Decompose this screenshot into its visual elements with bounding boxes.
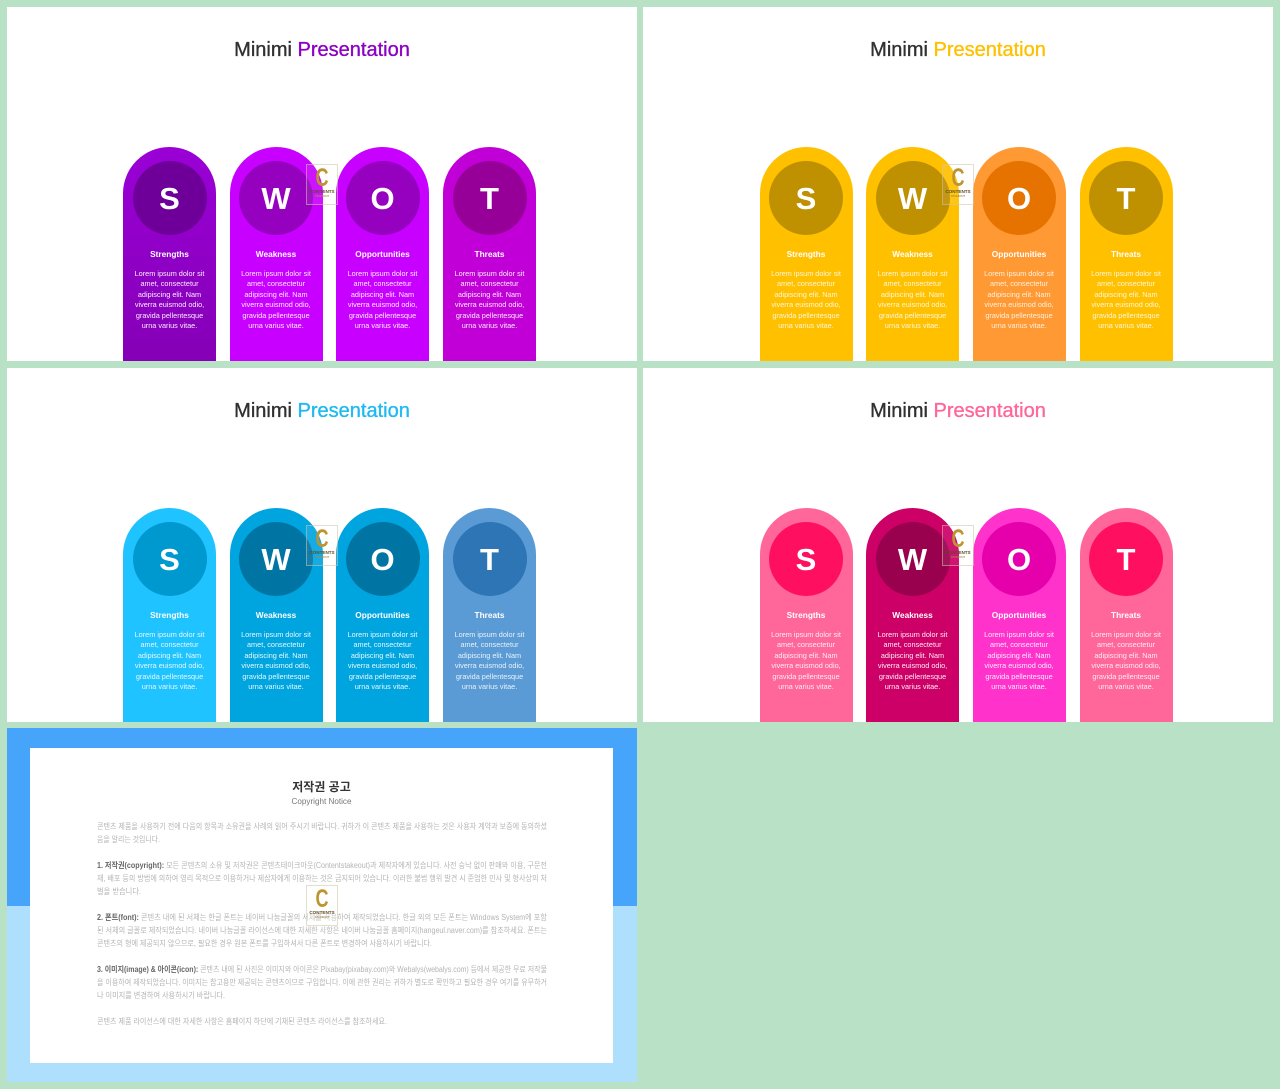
heading: Weakness: Weakness (892, 249, 933, 259)
text: Threats body (1091, 268, 1161, 330)
text: Threats body: adipiscing elit. Nam (458, 650, 521, 660)
text: Weakness body: amet, consectetur (884, 640, 942, 649)
text: Strengths body: Lorem ipsum dolor sit (771, 630, 841, 638)
text: Threats body: viverra euismod odio, (1091, 300, 1161, 309)
icon: watermark: C (951, 164, 965, 192)
card: Weakness (866, 147, 959, 361)
card: Weakness (230, 508, 322, 722)
text: Threats body: urna varius vitae. (1098, 321, 1154, 330)
text: Strengths body: gravida pellentesque (772, 672, 840, 680)
text: section 1 copyright (97, 860, 547, 896)
icon: T circle: T (1117, 542, 1135, 576)
text: Opportunities body: amet, consectetur (990, 640, 1048, 649)
text: Threats body: viverra euismod odio, (455, 661, 524, 670)
title: yellow: Minimi Presentation (870, 39, 1046, 61)
panel: purple SWOT (7, 7, 637, 361)
title: blue: Minimi Presentation (234, 400, 410, 422)
text: Opportunities body: amet, consectetur (354, 640, 412, 649)
icon: W circle (876, 160, 950, 234)
text: Opportunities body: adipiscing elit. Nam (351, 290, 414, 298)
notice sheet (30, 748, 613, 1063)
icon: S circle: S (159, 180, 180, 216)
card: Weakness (230, 147, 322, 361)
heading: Strengths: Strengths (787, 249, 825, 259)
text: Strengths body (771, 630, 841, 691)
text: Weakness body: Lorem ipsum dolor sit (878, 630, 947, 638)
text: Strengths body: gravida pellentesque (136, 672, 203, 680)
card: Opportunities (972, 508, 1066, 722)
icon: watermark: CONTENTS (309, 189, 335, 194)
text: introduction: 음을 알리는 것입니다. (97, 834, 160, 844)
text: Strengths body (771, 268, 841, 330)
text: Threats body: urna varius vitae. (1098, 682, 1154, 691)
icon: watermark (306, 885, 338, 926)
text: Strengths body: Lorem ipsum dolor sit (771, 268, 841, 278)
text: Threats body: urna varius vitae. (462, 321, 517, 330)
text: Weakness body: Lorem ipsum dolor sit (878, 268, 947, 278)
text: Strengths body: viverra euismod odio, (135, 300, 204, 309)
heading: Strengths: Strengths (787, 610, 825, 620)
text: Opportunities body: adipiscing elit. Nam (351, 650, 414, 660)
text: Strengths body (134, 630, 204, 691)
icon: W circle: W (261, 542, 291, 576)
heading: Threats: Threats (474, 249, 504, 259)
icon: watermark: C (315, 885, 329, 913)
text: section 1 copyright: 재, 배포 등의 방법에 의하여 영리 목적으로 이용하거나 제삼자에게 이용하는 것은 금지되어 있습니다. 이러한 불법 행위 발견 시 준엄한 민사 및 형사상의 처 (97, 873, 547, 883)
card: Threats (443, 147, 536, 361)
text: section 2 font: 콘텐츠의 형에 제공되지 않으므로, 필요한 경우 원본 폰트를 구입하셔서 다른 폰트로 변경하여 사용하시기 바랍니다. (97, 938, 432, 948)
text: Opportunities body: urna varius vitae. (991, 321, 1047, 330)
icon: S circle (132, 160, 206, 234)
text: introduction: 콘텐츠 제품을 사용하기 전에 다음의 항목과 소유권을 사례의 읽어 주시기 바랍니다. 귀하가 이 콘텐츠 제품을 사용하는 것은 사용자 계약과 보증에 동의하셨 (97, 821, 548, 831)
icon: T circle (1089, 160, 1163, 234)
text: Threats body: adipiscing elit. Nam (1094, 290, 1158, 298)
panel: pink SWOT (643, 368, 1273, 722)
text: Weakness body: viverra euismod odio, (878, 661, 947, 670)
card: Opportunities (336, 147, 429, 361)
icon: watermark: CONTENTS (309, 910, 335, 915)
text: section 3 image and icon: 을 이용하여 제작되었습니다. 이미지는 참고용만 제공되는 콘텐츠이므로 구입합니다. 이에 관한 권리는 귀하가 별도로 확인하고 필요한 경우 여기를 유무하거 (97, 977, 547, 987)
icon: S circle (769, 160, 843, 234)
icon: S circle: S (796, 542, 816, 576)
text: Opportunities body: urna varius vitae. (355, 682, 410, 691)
icon: watermark: STAKEOUT (315, 556, 329, 559)
text: Strengths body: amet, consectetur (140, 279, 198, 288)
text: Weakness body: gravida pellentesque (242, 310, 310, 320)
heading: Korean title: 저작권 공고 (292, 779, 351, 794)
card: Strengths (123, 508, 216, 722)
text: Opportunities body: Lorem ipsum dolor sit (984, 268, 1054, 278)
card: Weakness (866, 508, 959, 722)
icon: O circle: O (1007, 180, 1031, 216)
icon: T circle (1089, 522, 1163, 596)
text: Weakness body (241, 268, 311, 330)
icon: W circle: W (261, 180, 291, 216)
text: Threats body: Lorem ipsum dolor sit (1091, 268, 1161, 278)
text: Opportunities body: urna varius vitae. (355, 321, 410, 330)
icon: W circle: W (898, 180, 927, 216)
icon: S circle (132, 522, 206, 596)
title: purple: Minimi Presentation (234, 39, 410, 61)
text: Strengths body: adipiscing elit. Nam (138, 290, 201, 298)
icon: watermark: STAKEOUT (315, 916, 329, 919)
icon: watermark: STAKEOUT (315, 195, 329, 198)
icon: W circle: W (898, 542, 927, 576)
icon: T circle (452, 160, 526, 234)
icon: T circle: T (1117, 180, 1135, 216)
card: Threats (443, 508, 536, 722)
text: Threats body: gravida pellentesque (1092, 672, 1160, 680)
text: Opportunities body (348, 268, 418, 330)
text: Opportunities body: viverra euismod odio, (984, 661, 1054, 670)
text: Opportunities body: Lorem ipsum dolor sit (984, 630, 1054, 638)
icon: watermark (306, 164, 338, 205)
text: Threats body: viverra euismod odio, (455, 300, 524, 309)
text: Strengths body: urna varius vitae. (142, 321, 197, 330)
text: section 3 image and icon: 나 이미지를 변경하여 사용하시기 바랍니다. (97, 990, 225, 1000)
text: Strengths body: gravida pellentesque (136, 310, 203, 320)
text: section 2 font: 2. 폰트(font): 콘텐츠 내에 된 서체는 한글 폰트는 네이버 나눔글꼴의 서체를 사용하여 제작되었습니다. 한글 외의 모든 폰트는 Windows System에 포함 (97, 912, 548, 922)
text: Opportunities body: gravida pellentesque (985, 672, 1053, 680)
text: Strengths body: viverra euismod odio, (135, 661, 204, 670)
heading: Threats: Threats (474, 610, 504, 620)
text: section 3 image and icon: 3. 이미지(image) & 아이콘(icon): 콘텐츠 내에 된 사진은 이미지와 아이콘은 Pixabay(pixabay.com)와 Webalys(webalys.com) 등에서 제공한 무료 저작물 (97, 964, 547, 974)
text: Strengths body: adipiscing elit. Nam (138, 650, 201, 660)
icon: watermark: CONTENTS (945, 189, 971, 194)
card: Strengths (123, 147, 216, 361)
card: Threats (1080, 147, 1172, 361)
card: Strengths (760, 508, 852, 722)
text: Weakness body: adipiscing elit. Nam (244, 290, 308, 298)
text: Opportunities body (984, 630, 1054, 691)
text: Weakness body: viverra euismod odio, (241, 300, 311, 309)
text: Threats body: amet, consectetur (460, 279, 518, 288)
text: Weakness body: Lorem ipsum dolor sit (241, 630, 311, 638)
text: Threats body: Lorem ipsum dolor sit (455, 630, 524, 638)
text: Opportunities body: gravida pellentesque (349, 310, 416, 320)
text: Weakness body: urna varius vitae. (248, 321, 304, 330)
text: Opportunities body: amet, consectetur (354, 279, 412, 288)
heading: Opportunities: Opportunities (992, 249, 1046, 259)
text: Weakness body: gravida pellentesque (242, 672, 310, 680)
text: Opportunities body: adipiscing elit. Nam (987, 650, 1051, 660)
text: section 2 font: 된 서체의 글꼴로 제작되었습니다. 네이버 나눔글꼴 라이선스에 대한 자세한 사항은 네이버 나눔글꼴 홈페이지(hangeul.naver.com)를 참조하세요. 폰트는 (97, 925, 547, 935)
text: Strengths body: urna varius vitae. (142, 682, 197, 691)
heading: Opportunities: Opportunities (355, 249, 410, 259)
text: Strengths body: urna varius vitae. (778, 321, 834, 330)
icon: O circle: O (1007, 542, 1031, 576)
text: Weakness body: adipiscing elit. Nam (881, 290, 944, 298)
text: Threats body: gravida pellentesque (1092, 310, 1160, 320)
text: Weakness body (878, 630, 948, 691)
card: Strengths (760, 147, 852, 361)
icon: watermark: C (951, 525, 965, 553)
text: section 3 image and icon (97, 964, 547, 1000)
title: pink: Minimi Presentation (870, 400, 1046, 422)
text: Weakness body: Lorem ipsum dolor sit (241, 268, 311, 278)
text: Weakness body: adipiscing elit. Nam (881, 650, 944, 660)
heading: Weakness: Weakness (892, 610, 933, 620)
text: Weakness body: urna varius vitae. (885, 321, 940, 330)
text: Weakness body: gravida pellentesque (879, 672, 946, 680)
text: Threats body: Lorem ipsum dolor sit (1091, 630, 1161, 638)
text: Strengths body: Lorem ipsum dolor sit (135, 630, 204, 638)
heading: Weakness: Weakness (256, 610, 296, 620)
text: Threats body: adipiscing elit. Nam (1094, 650, 1158, 660)
heading: Threats: Threats (1111, 249, 1141, 259)
text: Strengths body: viverra euismod odio, (771, 300, 841, 309)
text: Threats body: urna varius vitae. (462, 682, 517, 691)
text: Threats body: amet, consectetur (1097, 640, 1155, 649)
icon: watermark: C (315, 525, 329, 553)
heading: Opportunities: Opportunities (355, 610, 410, 620)
text: Strengths body: amet, consectetur (140, 640, 198, 649)
icon: O circle (982, 522, 1056, 596)
text: Strengths body: gravida pellentesque (772, 310, 840, 320)
text: Weakness body: urna varius vitae. (248, 682, 304, 691)
icon: T circle: T (480, 542, 499, 576)
text: Strengths body: Lorem ipsum dolor sit (135, 268, 204, 278)
heading: Opportunities: Opportunities (992, 610, 1046, 620)
text: Opportunities body: gravida pellentesque (985, 310, 1053, 320)
text: Strengths body: amet, consectetur (777, 640, 835, 649)
icon: S circle: S (796, 180, 816, 216)
text: Threats body (454, 630, 524, 691)
text: Opportunities body: Lorem ipsum dolor sit (348, 630, 417, 638)
text: Strengths body: amet, consectetur (777, 279, 835, 288)
icon: O circle (982, 160, 1056, 234)
text: Opportunities body: Lorem ipsum dolor sit (348, 268, 417, 278)
panel: yellow SWOT (643, 7, 1273, 361)
text: Weakness body: amet, consectetur (884, 279, 942, 288)
text: Weakness body: viverra euismod odio, (878, 300, 947, 309)
card: Opportunities (972, 147, 1066, 361)
icon: watermark: STAKEOUT (951, 195, 965, 198)
text: Opportunities body: viverra euismod odio, (984, 300, 1054, 309)
heading: Strengths: Strengths (150, 249, 189, 259)
icon: O circle: O (370, 542, 395, 576)
text: Weakness body: amet, consectetur (247, 279, 305, 288)
text: Opportunities body (348, 630, 418, 691)
text: Opportunities body: viverra euismod odio, (348, 661, 417, 670)
icon: watermark: CONTENTS (309, 550, 335, 555)
card: Threats (1080, 508, 1172, 722)
panel: blue SWOT (7, 368, 637, 722)
text: Opportunities body: urna varius vitae. (991, 682, 1047, 691)
icon: O circle (346, 522, 420, 596)
text: Opportunities body: amet, consectetur (990, 279, 1048, 288)
text: Threats body: gravida pellentesque (456, 310, 523, 320)
heading: Weakness: Weakness (256, 249, 296, 259)
icon: watermark: CONTENTS (945, 550, 971, 555)
text: Weakness body: gravida pellentesque (879, 310, 946, 320)
text: Opportunities body: adipiscing elit. Nam (987, 290, 1051, 298)
text: Strengths body: adipiscing elit. Nam (774, 290, 838, 298)
icon: T circle: T (480, 180, 499, 216)
panel: copyright notice (7, 728, 637, 1082)
text: Opportunities body: viverra euismod odio, (348, 300, 417, 309)
text: Strengths body (134, 268, 204, 330)
icon: watermark (306, 525, 338, 566)
icon: watermark: STAKEOUT (951, 556, 965, 559)
text: Weakness body: viverra euismod odio, (241, 661, 311, 670)
heading: Copyright Notice: Copyright Notice (292, 796, 352, 806)
icon: W circle (239, 160, 313, 234)
text: Opportunities body: gravida pellentesque (349, 672, 416, 680)
text: Weakness body: adipiscing elit. Nam (244, 650, 308, 660)
text: Weakness body (241, 630, 311, 691)
text: Weakness body: urna varius vitae. (885, 682, 940, 691)
icon: watermark: C (315, 164, 329, 192)
icon: O circle: O (370, 180, 395, 216)
icon: S circle (769, 522, 843, 596)
text: Opportunities body (984, 268, 1054, 330)
icon: watermark (942, 525, 974, 566)
text: Strengths body: urna varius vitae. (778, 682, 834, 691)
icon: W circle (876, 522, 950, 596)
text: section 1 copyright: 벌을 받습니다. (97, 886, 141, 896)
icon: T circle (452, 522, 526, 596)
text: Threats body: Lorem ipsum dolor sit (455, 268, 524, 278)
icon: watermark (942, 164, 974, 205)
text: Threats body: viverra euismod odio, (1091, 661, 1161, 670)
text: Weakness body: amet, consectetur (247, 640, 305, 649)
icon: W circle (239, 522, 313, 596)
text: Threats body: amet, consectetur (1097, 279, 1155, 288)
text: Threats body (1091, 630, 1161, 691)
text: Threats body (454, 268, 524, 330)
icon: S circle: S (159, 542, 180, 576)
heading: Threats: Threats (1111, 610, 1141, 620)
text: introduction (97, 821, 548, 844)
text: Weakness body (878, 268, 948, 330)
text: Threats body: adipiscing elit. Nam (458, 290, 521, 298)
text: section 1 copyright: 1. 저작권(copyright): 모든 콘텐츠의 소유 및 저작권은 콘텐츠테이크아웃(Contentstakeout)과 제작자에게 있습니다. 사전 승낙 없이 판매와 이용, 구문전 (97, 860, 547, 870)
icon: O circle (346, 160, 420, 234)
text: section 2 font (97, 912, 548, 948)
text: Strengths body: viverra euismod odio, (771, 661, 841, 670)
text: closing note: 콘텐츠 제품 라이선스에 대한 자세한 사항은 홈페이지 하단에 기재된 콘텐츠 라이선스를 참조하세요. (97, 1016, 387, 1026)
text: Threats body: amet, consectetur (460, 640, 518, 649)
text: Threats body: gravida pellentesque (456, 672, 523, 680)
text: Strengths body: adipiscing elit. Nam (774, 650, 838, 660)
card: Opportunities (336, 508, 429, 722)
heading: Strengths: Strengths (150, 610, 189, 620)
